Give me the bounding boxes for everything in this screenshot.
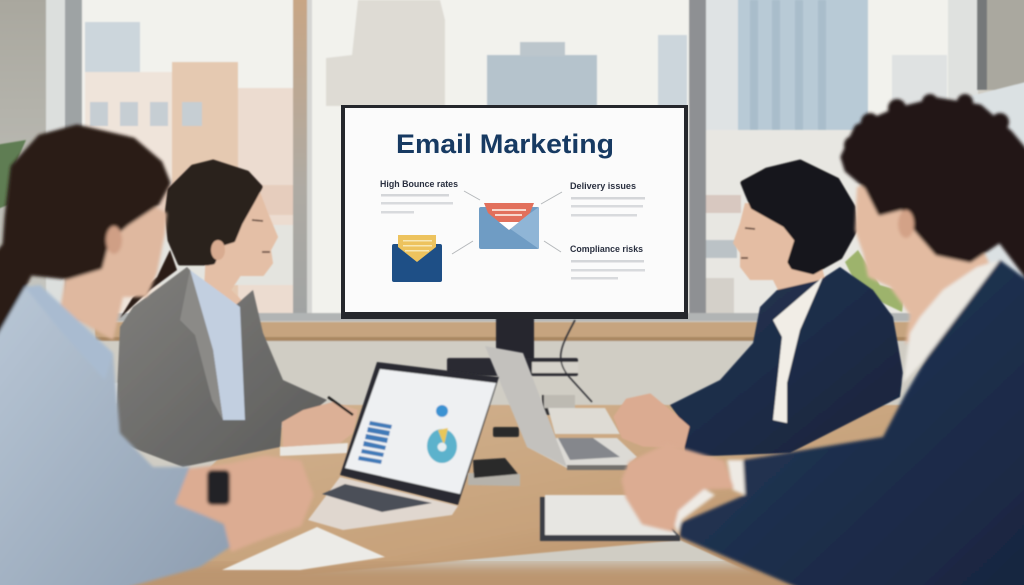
slide item: high bounce rates bbox=[380, 179, 458, 214]
wall under sill bbox=[0, 340, 1024, 430]
suit bbox=[680, 260, 1024, 585]
person: foreground man in navy suit bbox=[623, 94, 1024, 585]
face and neck bbox=[205, 187, 277, 310]
small badge bbox=[436, 405, 448, 417]
watch bbox=[207, 470, 230, 505]
table bbox=[90, 405, 1024, 585]
pen bbox=[328, 397, 353, 415]
base bbox=[308, 477, 458, 530]
face and neck bbox=[733, 203, 825, 300]
TV monitor bbox=[341, 105, 688, 319]
eye and lips bbox=[741, 228, 755, 258]
person: woman in navy blazer bbox=[615, 162, 903, 457]
monitor stand bbox=[447, 316, 592, 402]
face and neck bbox=[60, 190, 167, 340]
blazer bbox=[670, 267, 903, 457]
keyboard bbox=[322, 484, 432, 512]
table front shading bbox=[80, 565, 810, 585]
desk items: paper, device, clipboard bbox=[222, 458, 680, 570]
buildings right pane bbox=[738, 0, 868, 130]
hands bbox=[615, 395, 688, 447]
hair bbox=[743, 162, 855, 272]
laptop: rear silver laptop bbox=[485, 346, 637, 470]
plants bbox=[0, 140, 905, 312]
window frames bbox=[293, 0, 308, 320]
slide item: compliance risks: Compliance risks bbox=[570, 244, 643, 254]
slide item: delivery issues bbox=[570, 181, 645, 216]
shirt bbox=[0, 287, 230, 585]
chair back bbox=[103, 383, 119, 403]
laptop: front laptop with dashboard bbox=[308, 362, 499, 530]
hands bbox=[623, 445, 732, 530]
clipboard bbox=[540, 497, 680, 541]
collar bbox=[903, 260, 1000, 383]
hair bbox=[167, 162, 260, 263]
ear bbox=[898, 210, 914, 238]
device stack bbox=[468, 473, 520, 486]
bar chart bbox=[358, 421, 392, 464]
slide title: Email Marketing bbox=[396, 129, 614, 159]
slide item: delivery issues: Delivery issues bbox=[570, 181, 636, 191]
face and neck bbox=[855, 175, 990, 345]
blazer bbox=[115, 267, 327, 467]
hair and ponytail bbox=[0, 127, 168, 345]
lapel shadow bbox=[180, 270, 223, 420]
curly hair bbox=[843, 94, 1024, 280]
ponytail bbox=[120, 250, 177, 318]
monitor base box and white paper on table bbox=[493, 395, 620, 437]
eye and lips bbox=[252, 220, 270, 252]
arrows: connector lines bbox=[452, 191, 562, 254]
shirt bbox=[773, 277, 823, 423]
ear bbox=[211, 240, 225, 260]
person: woman in grey blazer bbox=[103, 162, 358, 467]
shirt bbox=[190, 270, 245, 420]
cuffs bbox=[672, 460, 745, 535]
collar bbox=[25, 285, 113, 380]
lid bbox=[340, 362, 499, 505]
person: foreground woman in light blue shirt bbox=[0, 127, 312, 585]
notebook bbox=[280, 443, 348, 456]
ear bbox=[106, 226, 122, 254]
slide item: compliance risks bbox=[570, 244, 645, 280]
icon: blue open envelope with red letter bbox=[479, 203, 539, 249]
forearm skin bbox=[177, 457, 312, 550]
buildings left pane bbox=[85, 22, 140, 72]
donut chart bbox=[427, 429, 457, 463]
paper under hands bbox=[222, 527, 385, 570]
icon: navy envelope with yellow letter bbox=[392, 235, 442, 282]
hand bbox=[282, 402, 358, 447]
screen bbox=[345, 369, 496, 494]
slide item: high bounce rates: High Bounce rates bbox=[380, 179, 458, 189]
buildings centre pane bbox=[326, 0, 445, 106]
